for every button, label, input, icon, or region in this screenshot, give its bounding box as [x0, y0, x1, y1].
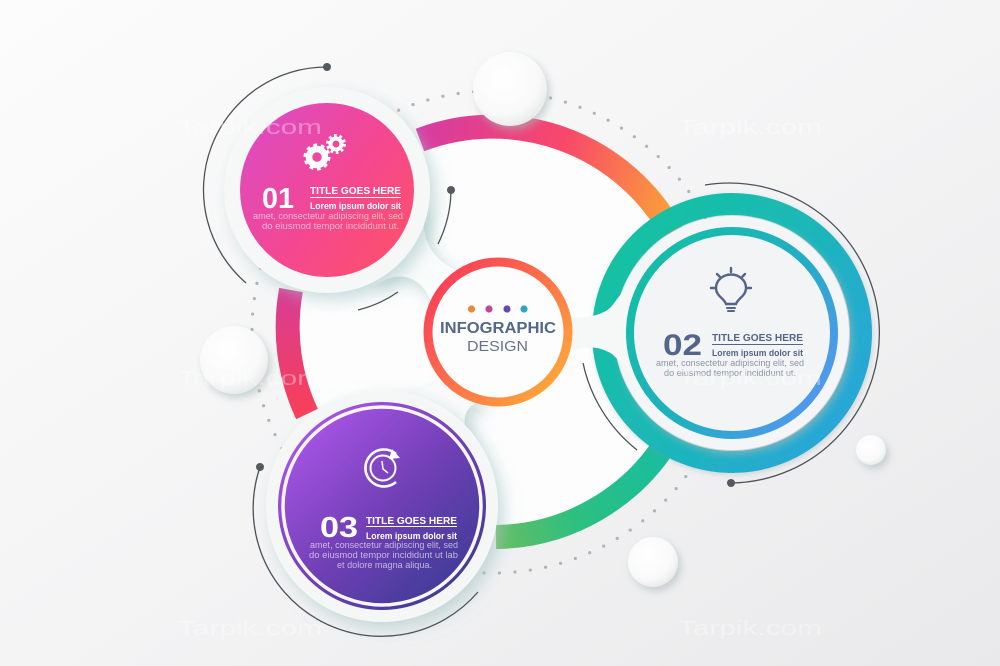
- icon: light bulb: [711, 268, 751, 311]
- sphere right: [856, 435, 886, 465]
- panel 1 body: amet, consectetur adipiscing elit, sed: [253, 211, 403, 221]
- watermarks: Tarpik.com: [678, 117, 822, 139]
- panel 2 body: do eiusmod tempor incididunt ut.: [664, 368, 796, 378]
- arc: panel 3 outer: [253, 467, 478, 636]
- watermarks: Tarpik.com: [178, 368, 322, 390]
- panel 2: teal ring card: [560, 204, 861, 462]
- dotted orbit: [252, 91, 734, 573]
- panel 1 title: TITLE GOES HERE: [310, 185, 401, 197]
- watermarks: Tarpik.com: [678, 368, 822, 390]
- number 02: 02: [663, 329, 702, 362]
- purple disc: [278, 402, 486, 610]
- arc: panel 1 bottom: [358, 292, 398, 310]
- panel 2 content: [656, 268, 804, 378]
- icon: clock: [365, 449, 400, 486]
- ring segment: left pink to red: [288, 290, 307, 414]
- number 03: 03: [320, 512, 358, 544]
- thin arcs with end dots: [203, 67, 879, 636]
- panel 3 body: do eiusmod tempor incididunt ut lab: [309, 550, 458, 560]
- inner white disc: [299, 138, 687, 526]
- arc end dots: [256, 63, 735, 487]
- center ring: [428, 262, 568, 402]
- sphere bottom: [628, 537, 678, 587]
- panel 1 subtitle: Lorem ipsum dolor sit: [310, 201, 402, 212]
- connectors to center: [370, 200, 486, 450]
- panel 2 body: amet, consectetur adipiscing elit, sed: [656, 358, 804, 368]
- sphere top: [473, 52, 547, 126]
- arc: panel 2 lower left: [583, 363, 637, 450]
- ring segment: top pink to orange: [420, 127, 672, 232]
- arc: panel 1 outer: [203, 67, 327, 283]
- color dots: [468, 305, 528, 313]
- watermarks: Tarpik.com: [178, 117, 322, 139]
- halo: [224, 87, 430, 293]
- panel 1: pink circle: [224, 87, 430, 293]
- ring segment: bottom green: [496, 436, 670, 537]
- panel 3 body: et dolore magna aliqua.: [337, 560, 432, 570]
- panel 3 body: amet, consectetur adipiscing elit, sed: [310, 540, 458, 550]
- outer teal ring: [603, 204, 861, 462]
- watermarks: [178, 117, 822, 640]
- panel 2 title: TITLE GOES HERE: [712, 332, 803, 344]
- panel 3 title: TITLE GOES HERE: [366, 515, 457, 527]
- arc: panel 2 outer: [705, 183, 879, 483]
- icon: gears: [306, 136, 344, 168]
- panel 2 subtitle: Lorem ipsum dolor sit: [712, 348, 804, 359]
- center circle: [428, 262, 568, 402]
- white disc: [615, 216, 849, 450]
- connector: panel 3 to center: [400, 372, 486, 450]
- sphere left: [200, 326, 268, 394]
- pink disc: [240, 103, 414, 277]
- center subtitle: DESIGN: [467, 338, 528, 355]
- halo: [266, 390, 498, 622]
- inner teal ring: [630, 231, 834, 435]
- white inner ring: [283, 407, 481, 605]
- connector: panel 2 to center: [560, 280, 640, 385]
- decorative spheres: [200, 52, 886, 587]
- connector: panel 1 to center: [370, 200, 462, 305]
- number 01: 01: [262, 183, 294, 215]
- panel 1 body: do eiusmod tempor incididunt ut.: [262, 221, 399, 231]
- watermarks: Tarpik.com: [678, 618, 822, 640]
- panel 3 subtitle: Lorem ipsum dolor sit: [366, 531, 458, 542]
- panel 3: purple circle: [266, 390, 498, 622]
- center title: INFOGRAPHIC: [440, 320, 556, 337]
- arc: panel 1 right: [438, 190, 451, 244]
- watermarks: Tarpik.com: [178, 618, 322, 640]
